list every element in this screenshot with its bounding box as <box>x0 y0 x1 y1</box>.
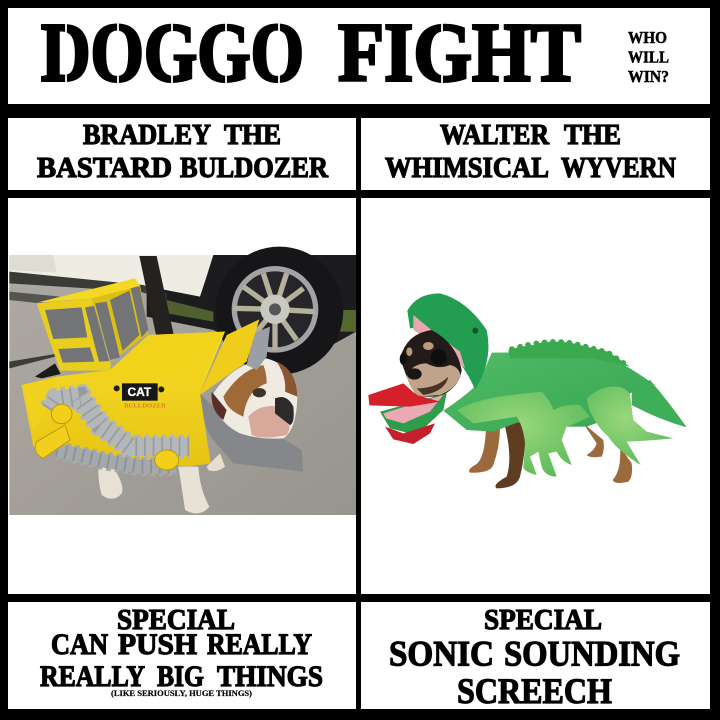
text: Bradley special: REALLY <box>40 660 145 693</box>
blade <box>199 319 270 395</box>
rear leg <box>587 387 673 465</box>
text: Walter name: WALTER <box>440 119 550 151</box>
front arm <box>457 392 590 477</box>
panel: left name <box>8 118 356 190</box>
logo: CAT: BULLDOZER <box>124 403 166 410</box>
panel: left special <box>8 602 356 709</box>
text: Bradley name: BASTARD <box>37 152 172 184</box>
text: Walter special <box>389 604 680 711</box>
text: Bradley name: THE <box>224 119 281 151</box>
text: Bradley special: PUSH <box>118 628 197 661</box>
text: Walter name: WHIMSICAL <box>385 152 549 184</box>
text: Bradley name: BULDOZER <box>180 152 329 184</box>
lower jaw <box>380 393 447 444</box>
text: who will win: WHO <box>628 28 667 47</box>
text: Bradley special: THINGS <box>217 660 323 693</box>
dog face <box>400 330 462 397</box>
dog head <box>211 358 297 439</box>
text: who will win: WIN? <box>628 67 669 86</box>
illustration: wyvern dog <box>368 293 687 488</box>
text: Walter special: SOUNDING <box>504 634 680 674</box>
text: Walter special: SCREECH <box>457 671 612 711</box>
heading: Doggo Fight: FIGHT <box>338 6 581 100</box>
dog legs <box>98 453 225 513</box>
text: Bradley special <box>40 604 323 698</box>
red tongue <box>368 383 440 407</box>
text: Bradley name <box>37 119 329 184</box>
wyvern tail <box>632 380 687 427</box>
text: Bradley special: CAN <box>51 628 108 661</box>
wheels <box>35 404 179 470</box>
hood <box>407 293 488 390</box>
text: Walter special: SPECIAL <box>484 604 602 636</box>
text: Walter name <box>385 119 676 184</box>
text: Bradley special: SPECIAL <box>117 604 235 636</box>
heading: Doggo Fight: DOGGO <box>41 6 304 100</box>
tracks <box>50 397 190 467</box>
text: Bradley special: (LIKE SERIOUSLY, HUGE THINGS) <box>111 688 252 698</box>
text: Bradley special: BIG <box>157 660 204 693</box>
text: who will win <box>628 28 669 86</box>
dog legs <box>469 420 632 488</box>
illustration: bulldozer dog <box>9 247 356 515</box>
text: Bradley name: BRADLEY <box>83 119 211 151</box>
logo: CAT: CAT <box>127 385 152 399</box>
panel: right special <box>361 602 710 711</box>
gray cone <box>200 393 303 472</box>
text: Walter special: SONIC <box>389 634 494 674</box>
heading: Doggo Fight <box>41 6 581 100</box>
panel: right image <box>361 198 710 594</box>
panel: title <box>8 6 710 104</box>
text: Bradley special: REALLY <box>207 628 312 661</box>
text: Walter name: THE <box>564 119 621 151</box>
wyvern body <box>443 342 650 432</box>
scene: concrete and car <box>9 247 356 515</box>
logo: CAT <box>114 383 166 410</box>
panel: right name <box>361 118 710 190</box>
exhaust pipe <box>139 256 177 355</box>
bulldozer body <box>22 332 225 467</box>
text: who will win: WILL <box>628 48 669 66</box>
bulldozer cab <box>37 278 148 371</box>
panel: left image <box>8 198 356 594</box>
text: Walter name: WYVERN <box>561 152 676 184</box>
